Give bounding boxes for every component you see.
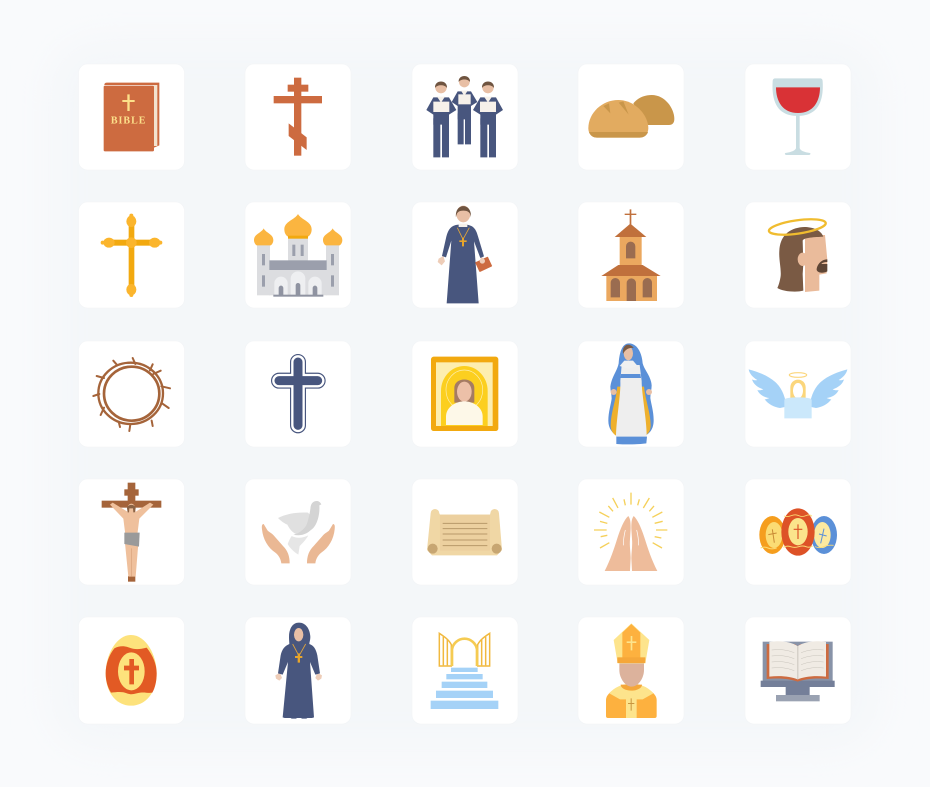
card: crucifix (78, 479, 184, 585)
card: bread (578, 64, 684, 170)
card: bishop (578, 617, 684, 724)
card: crown of thorns (78, 341, 184, 447)
icon: nun (275, 623, 322, 719)
icon: framed saint portrait (431, 357, 498, 431)
card: wooden church (578, 202, 684, 308)
icon: bishop with mitre (606, 623, 657, 718)
icon: open book on lectern (761, 641, 835, 701)
icon: gates and stairs (431, 633, 498, 709)
card: jesus head (745, 202, 851, 308)
card: wine glass (745, 64, 851, 170)
card: choir (412, 64, 518, 170)
icon: orthodox cross (274, 78, 322, 156)
card: bible (78, 64, 184, 170)
card: nun (245, 617, 351, 724)
card: virgin mary (578, 341, 684, 447)
icon: bible book: BIBLE (111, 115, 146, 126)
card: dove (245, 479, 351, 585)
icon: wine glass (773, 78, 823, 155)
icon: parchment scroll (427, 509, 502, 555)
card: gold cross (78, 202, 184, 308)
icon: single easter egg (106, 635, 157, 706)
icon: three choir singers (426, 76, 503, 157)
icon: three easter eggs (759, 508, 837, 556)
icon: outlined navy cross (279, 362, 318, 425)
icon: domed cathedral (254, 214, 342, 297)
icon: small church with steeple (601, 209, 661, 301)
icon: golden cross (101, 214, 162, 297)
icon: angel with wings (749, 369, 847, 418)
icon: crown of thorns (93, 358, 170, 431)
icon: bread loaves (588, 95, 674, 138)
card: scroll (412, 479, 518, 585)
card: orthodox cross (245, 64, 351, 170)
icon: head with halo (768, 216, 827, 292)
icon: mary statue (608, 343, 654, 444)
card: religious icon painting (412, 341, 518, 447)
card: heaven gates (412, 617, 518, 724)
card: orthodox church (245, 202, 351, 308)
card: navy cross (245, 341, 351, 447)
icon: dove above hands (262, 501, 335, 563)
card: angel (745, 341, 851, 447)
icon: crucifix (102, 483, 161, 582)
card: priest (412, 202, 518, 308)
card: easter eggs (745, 479, 851, 585)
icon: priest with book (438, 206, 492, 303)
card: easter egg (78, 617, 184, 724)
card: lectern bible (745, 617, 851, 724)
icon: praying hands with rays (594, 493, 667, 571)
card: praying hands (578, 479, 684, 585)
